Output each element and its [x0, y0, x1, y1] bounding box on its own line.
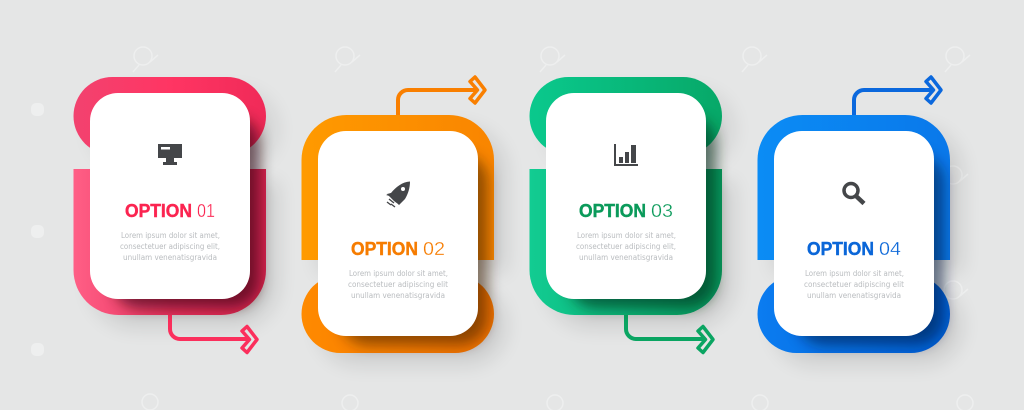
card: option 01: [90, 93, 250, 299]
text: option 03: [576, 231, 676, 262]
text: option 01: unullam venenatisgravida: [123, 253, 217, 262]
heading: option 03: 03: [651, 200, 673, 221]
text: option 02: [348, 269, 448, 300]
text: option 03: consectetuer adipiscing elit,: [576, 242, 676, 251]
heading: option 02: 02: [423, 238, 445, 259]
heading: option 01: 01: [197, 200, 215, 221]
text: option 01: consectetuer adipiscing elit,: [120, 242, 220, 251]
panel: option 02: [302, 77, 506, 365]
panel: option 03: [530, 77, 734, 352]
text: option 04: Lorem ipsum dolor sit amet,: [805, 269, 904, 278]
card: option 04: [774, 131, 934, 336]
icon: monitor: [158, 144, 182, 165]
heading: option 03: OPTION: [579, 200, 646, 221]
text: option 01: [120, 231, 220, 262]
text: option 02: consectetuer adipiscing elit: [348, 280, 448, 289]
icon: magnifier: [844, 184, 864, 204]
panel: option 01: [74, 77, 278, 352]
text: option 04: unullam venenatisgravida: [807, 291, 901, 300]
text: option 02: unullam venenatisgravida: [351, 291, 445, 300]
card: option 03: [546, 93, 706, 299]
text: option 04: [804, 269, 904, 300]
panel: option 04: [758, 77, 962, 365]
text: option 01: Lorem ipsum dolor sit amet,: [121, 231, 220, 240]
text: option 02: Lorem ipsum dolor sit amet,: [349, 269, 448, 278]
heading: option 02: OPTION: [351, 238, 418, 259]
arrow: option 01: [170, 314, 257, 352]
heading: option 01: OPTION: [125, 200, 192, 221]
text: option 03: Lorem ipsum dolor sit amet,: [577, 231, 676, 240]
arrow: option 02: [398, 77, 485, 116]
arrow: option 04: [854, 77, 941, 116]
text: option 04: consectetuer adipiscing elit: [804, 280, 904, 289]
card: option 02: [318, 131, 478, 336]
icon: bar chart: [614, 144, 638, 166]
icon: rocket: [386, 182, 410, 207]
heading: option 04: 04: [879, 238, 901, 259]
text: option 03: unullam venenatisgravida: [579, 253, 673, 262]
arrow: option 03: [626, 314, 713, 352]
heading: option 04: OPTION: [807, 238, 874, 259]
